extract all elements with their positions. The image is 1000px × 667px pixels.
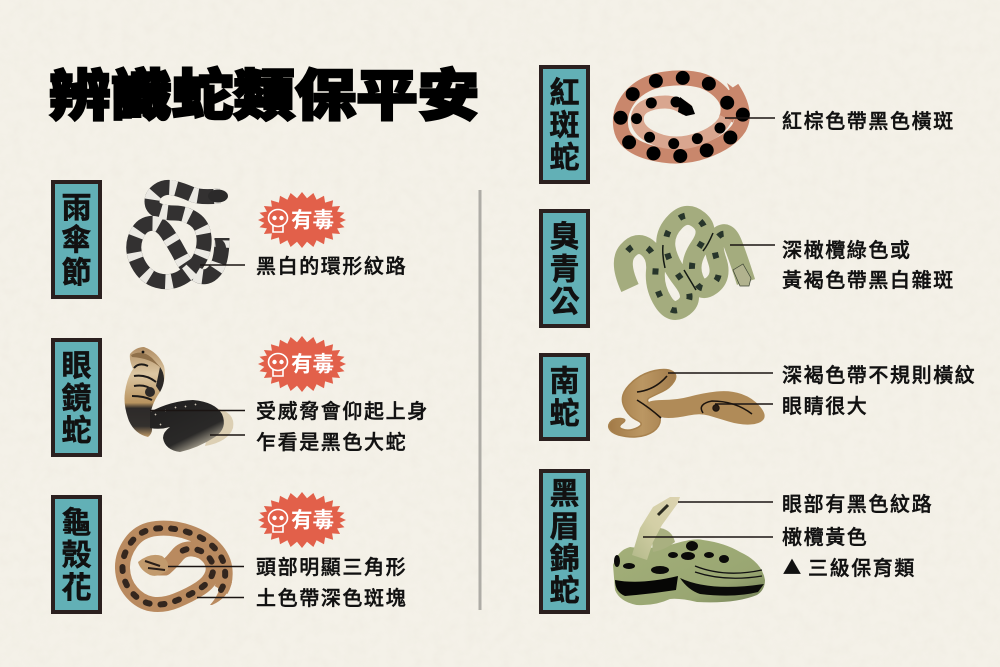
name label: 眼鏡蛇: 鏡 (62, 382, 92, 416)
name label: 臭青公: 公 (550, 286, 580, 319)
callout text: 頭部明顯三角形 (256, 556, 407, 579)
poison badge: 有毒 (291, 352, 334, 376)
name label: 黑眉錦蛇 (541, 471, 588, 612)
name label: 臭青公 (541, 211, 588, 326)
name label: 眼鏡蛇: 眼 (62, 350, 92, 383)
callout text: 深橄欖綠色或 (782, 239, 912, 262)
poison badge: 有毒 (291, 208, 334, 232)
snake illustration: pit viper (122, 528, 232, 605)
name label: 紅斑蛇: 紅 (550, 77, 580, 110)
name label: 黑眉錦蛇: 黑 (550, 478, 580, 511)
name label: 南蛇 (541, 355, 588, 439)
name label: 紅斑蛇: 蛇 (550, 142, 580, 175)
name label: 龜殼花 (53, 497, 100, 612)
name label: 龜殼花: 龜 (62, 507, 92, 540)
poison badge (258, 492, 346, 548)
snake illustration: red banded snake (620, 78, 745, 156)
leader lines (150, 410, 245, 435)
callout text: 黑白的環形紋路 (256, 255, 407, 278)
leader lines (168, 566, 244, 598)
callout text (256, 400, 429, 454)
name label: 南蛇: 蛇 (550, 398, 580, 431)
callout text: ▲ (783, 554, 803, 580)
panel: 臭青公 (541, 211, 955, 326)
name label: 眼鏡蛇: 蛇 (62, 415, 92, 448)
name label: 臭青公: 青 (550, 254, 580, 286)
panel: 黑眉錦蛇 (541, 471, 933, 612)
callout text: 黃褐色帶黑白雜斑 (782, 269, 955, 292)
callout text: 深褐色帶不規則橫紋 (782, 364, 976, 387)
leader line (725, 117, 775, 119)
name label: 龜殼花: 殼 (62, 540, 92, 572)
title: 辨識蛇類保平安 (49, 66, 479, 127)
name label: 臭青公: 臭 (550, 221, 580, 254)
leader line (730, 244, 775, 246)
callout text: 土色帶深色斑塊 (256, 587, 407, 610)
name label: 眼鏡蛇 (53, 340, 100, 455)
name label: 紅斑蛇 (541, 67, 588, 182)
name label: 雨傘節: 傘 (62, 224, 92, 257)
panel: 眼鏡蛇 (53, 336, 429, 455)
name label: 雨傘節: 雨 (62, 192, 92, 225)
callout text: 紅棕色帶黑色橫斑 (782, 110, 955, 133)
name label: 黑眉錦蛇: 蛇 (550, 575, 580, 608)
name label: 雨傘節 (53, 182, 100, 297)
callout text (256, 556, 407, 610)
poison badge: 有毒 (291, 508, 334, 532)
callout text: 受威脅會仰起上身 (256, 400, 429, 423)
name label: 黑眉錦蛇: 眉 (550, 511, 580, 544)
callout text: 眼部有黑色紋路 (782, 493, 933, 516)
callout text: 眼睛很大 (782, 395, 868, 418)
callout text (782, 364, 976, 418)
name label: 雨傘節: 節 (62, 257, 92, 290)
callout text (782, 493, 933, 580)
poison badge (258, 336, 346, 392)
name label: 南蛇: 南 (550, 366, 580, 398)
panel: 南蛇 (541, 355, 976, 439)
callout text: 橄欖黃色 (782, 526, 868, 549)
poison badge (258, 192, 346, 248)
snake illustration: taiwan stink snake (623, 215, 751, 310)
leader line (200, 264, 245, 266)
leader lines (643, 502, 773, 537)
panel: 龜殼花 (53, 492, 407, 612)
name label: 黑眉錦蛇: 錦 (550, 543, 580, 576)
panel: 雨傘節 (53, 182, 407, 297)
divider (478, 190, 482, 610)
snake illustration: beauty snake (613, 497, 765, 605)
snake illustration: cobra (124, 347, 233, 452)
panel: 紅斑蛇 (541, 67, 955, 182)
name label: 紅斑蛇: 斑 (550, 110, 580, 142)
name label: 龜殼花: 花 (62, 572, 92, 605)
callout text: 乍看是黑色大蛇 (256, 431, 407, 454)
snake illustration: banded krait (134, 187, 228, 282)
callout text: 三級保育類 (808, 557, 916, 580)
leader lines (668, 373, 773, 404)
callout text (782, 239, 955, 292)
snake illustration: rat snake (609, 369, 765, 437)
